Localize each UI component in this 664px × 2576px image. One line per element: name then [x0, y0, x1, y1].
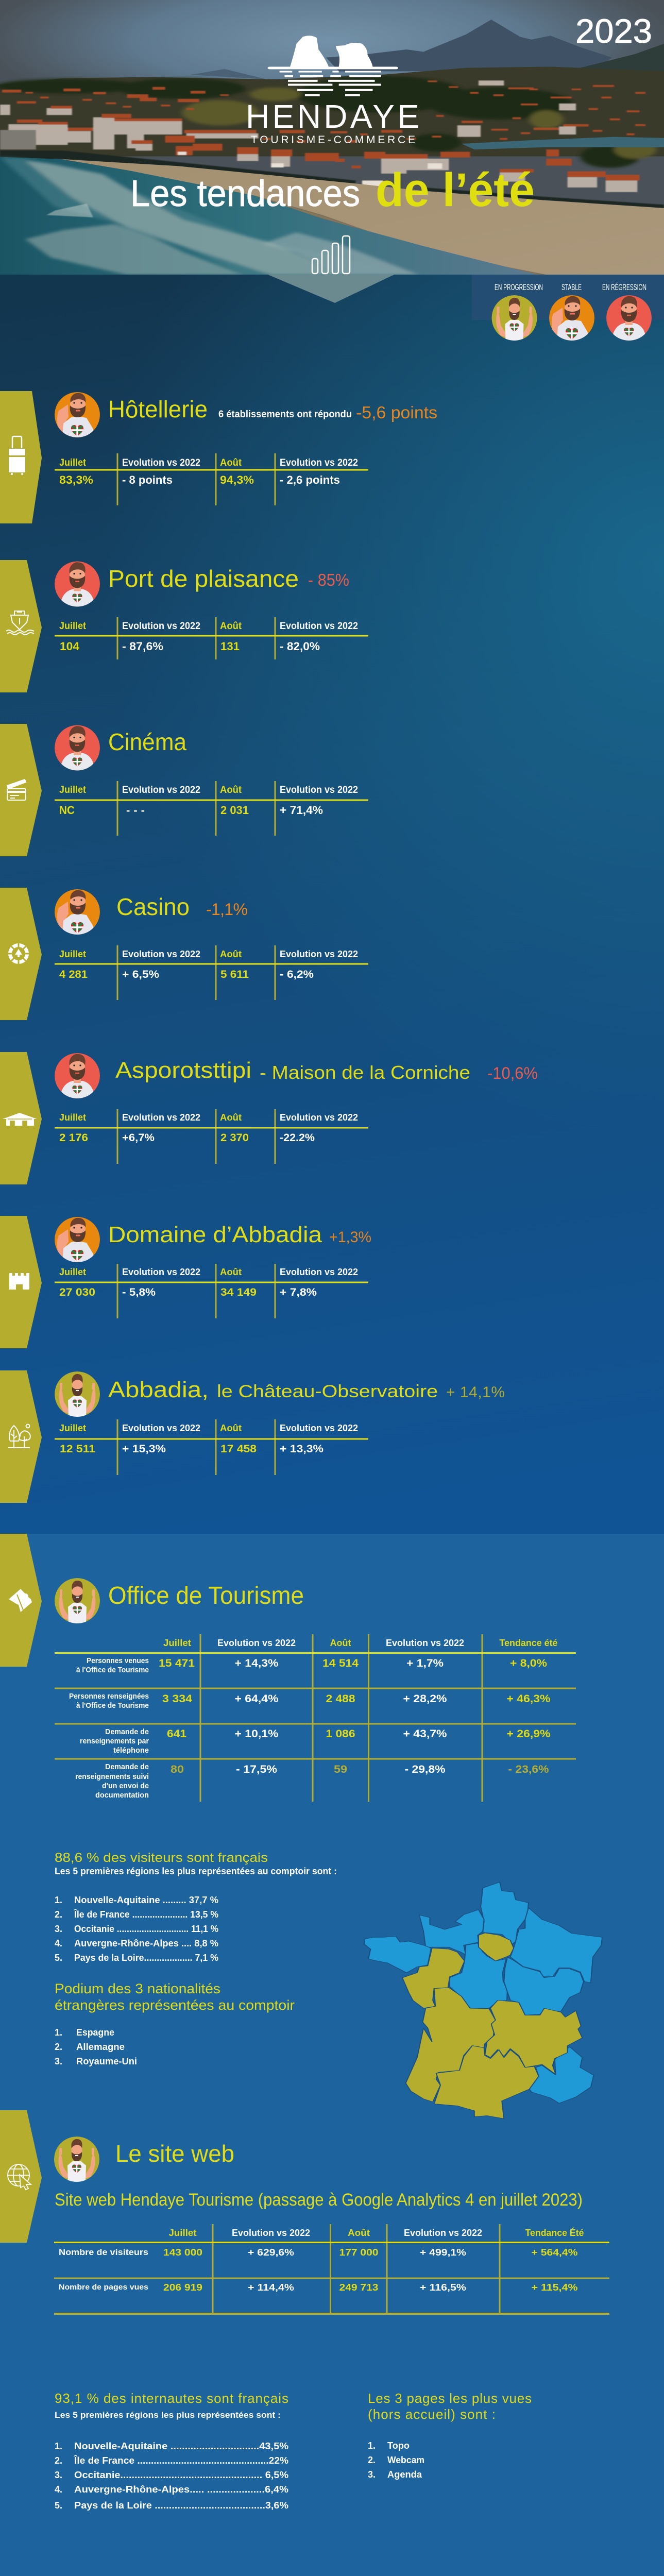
logo Hendaye: HENDAYE: [246, 98, 419, 135]
text block: internet users: Île de France ................................................22%: [74, 2455, 288, 2466]
text block: top pages: Topo: [387, 2441, 410, 2451]
panel: Domaine d'Abbadia: [0, 1216, 371, 1348]
table: Evolution vs 2022: [122, 1267, 200, 1277]
text block: top pages: Agenda: [387, 2469, 422, 2480]
table: Evolution vs 2022: [386, 1638, 464, 1648]
text block: podium nationalities: 1.: [55, 2027, 62, 2038]
table: Tendance été: [500, 1638, 557, 1648]
tab with suitcase icon: [0, 391, 42, 523]
legend: EN PROGRESSION: [495, 282, 543, 292]
table: 27 030: [59, 1286, 95, 1298]
table: Août: [220, 1267, 242, 1277]
panel: Le site web: [0, 2110, 609, 2511]
table: Août: [348, 2228, 370, 2238]
table: [55, 1109, 368, 1164]
table: Août: [330, 1638, 351, 1648]
panel: Cinéma: Cinéma: [108, 728, 186, 755]
tab with castle icon: [0, 1216, 42, 1348]
table: + 8,0%: [510, 1657, 547, 1669]
text block: visitors regions: 2.: [55, 1909, 62, 1920]
table: Evolution vs 2022: [232, 2228, 310, 2238]
text block: internet users: Auvergne-Rhône-Alpes..... ....................6,4%: [74, 2484, 288, 2495]
table: Août: [220, 1423, 242, 1433]
table: Evolution vs 2022: [217, 1638, 296, 1648]
table: Evolution vs 2022: [280, 785, 358, 795]
text block: top pages: Webcam: [387, 2455, 424, 2465]
table: + 14,3%: [235, 1657, 279, 1669]
icon: bar chart: [312, 236, 350, 274]
table: 59: [334, 1764, 347, 1775]
table: Juillet: [59, 1423, 86, 1433]
table: Personnes venues: [87, 1656, 149, 1665]
tab with office icon: [0, 1534, 42, 1667]
text block: internet users: [55, 2391, 288, 2511]
table: Juillet: [59, 1112, 86, 1123]
table: Juillet: [59, 621, 87, 632]
table: - 29,8%: [405, 1764, 446, 1775]
panel: Abbadia, le Château-Observatoire: + 14,1%: [446, 1384, 505, 1401]
text block: top pages: 3.: [368, 2469, 376, 2480]
table: [55, 453, 368, 505]
table: + 1,7%: [406, 1657, 444, 1669]
title: [130, 164, 535, 216]
text block: internet users: Nouvelle-Aquitaine ...............................43,5%: [74, 2441, 288, 2451]
table: NC: [59, 804, 75, 817]
title: de l’été: [376, 164, 535, 216]
panel: Le site web: Site web Hendaye Tourisme (passage à Google Analytics 4 en juillet 2023): [55, 2190, 583, 2210]
table: Evolution vs 2022: [122, 785, 200, 795]
table: - 17,5%: [236, 1764, 277, 1775]
text block: visitors regions: 1.: [55, 1895, 62, 1905]
panel: Asporotsttipi: - Maison de la Corniche: [260, 1062, 470, 1083]
tab with trees icon: [0, 1370, 42, 1503]
text block: visitors regions: Île de France ...................... 13,5 %: [74, 1909, 218, 1920]
panel: Casino: -1,1%: [206, 900, 248, 919]
table: + 115,4%: [532, 2282, 578, 2293]
table: - 82,0%: [280, 640, 320, 653]
table: à l'Office de Tourisme: [76, 1701, 149, 1710]
panel: Abbadia, le Château-Observatoire: le Château-Observatoire: [217, 1382, 438, 1401]
table: Evolution vs 2022: [122, 621, 200, 632]
text block: visitors regions: 3.: [55, 1924, 62, 1934]
table: - 8 points: [122, 473, 173, 486]
table: + 26,9%: [507, 1728, 551, 1740]
table: Evolution vs 2022: [280, 1423, 358, 1433]
table: 2 370: [220, 1132, 249, 1144]
table: [55, 1264, 368, 1318]
table: Août: [220, 621, 242, 632]
table: [55, 1419, 368, 1475]
panel: Asporotsttipi: -10,6%: [487, 1064, 538, 1082]
text block: visitors regions: Nouvelle-Aquitaine ......... 37,7 %: [74, 1895, 218, 1905]
text block: top pages: 2.: [368, 2455, 376, 2465]
table: Evolution vs 2022: [122, 949, 200, 959]
panel: Port de plaisance: [0, 560, 368, 692]
text block: visitors regions: Auvergne-Rhône-Alpes .... 8,8 %: [74, 1938, 218, 1948]
table: + 28,2%: [403, 1693, 447, 1705]
table: renseignements par: [80, 1737, 149, 1745]
tab with clapperboard icon: [0, 724, 42, 856]
panel: Hôtellerie: Hôtellerie: [108, 396, 208, 422]
panel: Abbadia, le Château-Observatoire: [0, 1370, 505, 1503]
map of France by region: [364, 1882, 602, 2119]
table: Juillet: [59, 785, 87, 795]
table: 2 176: [59, 1132, 88, 1144]
table: + 71,4%: [280, 804, 323, 817]
text block: top pages: (hors accueil) sont :: [368, 2406, 496, 2422]
table: Août: [220, 457, 242, 468]
text block: podium nationalities: 3.: [55, 2056, 62, 2066]
panel: Casino: [0, 888, 368, 1020]
tab with casino chip icon: [0, 888, 42, 1020]
panel: Port de plaisance: Port de plaisance: [108, 565, 299, 592]
table: Evolution vs 2022: [122, 1423, 200, 1433]
panel: Domaine d'Abbadia: +1,3%: [329, 1229, 371, 1246]
table: ---: [126, 804, 145, 817]
panel: Port de plaisance: - 85%: [308, 570, 349, 589]
table: téléphone: [113, 1746, 149, 1755]
table: [55, 781, 368, 836]
table: + 7,8%: [280, 1286, 317, 1298]
text block: visitors regions: Occitanie ............................. 11,1 %: [74, 1924, 218, 1934]
table: 14 514: [322, 1657, 359, 1669]
table: 143 000: [163, 2247, 202, 2258]
text block: podium nationalities: 2.: [55, 2042, 62, 2052]
panel: Casino: Casino: [116, 893, 190, 920]
table: Evolution vs 2022: [122, 457, 200, 468]
text block: internet users: 4.: [55, 2484, 62, 2495]
table: 249 713: [339, 2282, 378, 2293]
header photo of Hendaye beach: [0, 0, 664, 303]
text block: internet users: Les 5 premières régions les plus représentées sont :: [55, 2410, 281, 2420]
text block: internet users: Occitanie.................................................. 6,5%: [74, 2470, 288, 2480]
panel: Office de Tourisme: [0, 1534, 602, 2119]
text block: podium nationalities: Espagne: [76, 2027, 114, 2038]
table: Evolution vs 2022: [280, 621, 358, 632]
text block: internet users: 3.: [55, 2470, 62, 2480]
table: Demande de: [105, 1727, 149, 1736]
table: Août: [220, 785, 242, 795]
table: - 23,6%: [508, 1764, 549, 1775]
table: - 87,6%: [122, 640, 163, 653]
table: [55, 945, 368, 1000]
table: [55, 1634, 576, 1802]
table: 4 281: [59, 969, 88, 980]
table: + 499,1%: [420, 2247, 466, 2258]
table: + 114,4%: [248, 2282, 294, 2293]
table: [55, 617, 368, 659]
table: + 46,3%: [507, 1693, 551, 1705]
table: d'un envoi de: [102, 1782, 149, 1790]
table: Juillet: [59, 949, 86, 959]
table: renseignements suivi: [75, 1772, 149, 1781]
table: 1 086: [326, 1728, 355, 1740]
legend: STABLE: [561, 282, 582, 292]
text block: podium nationalities: [55, 1981, 295, 2066]
year: 2023: [575, 12, 652, 50]
title: Les tendances: [130, 173, 360, 214]
table: 5 611: [220, 969, 249, 980]
tab with building icon: [0, 1052, 42, 1184]
table: [54, 2224, 609, 2315]
table: 12 511: [60, 1443, 95, 1455]
table: Juillet: [169, 2228, 197, 2238]
logo Hendaye: [246, 36, 419, 146]
table: Juillet: [59, 1267, 86, 1277]
text block: podium nationalities: Royaume-Uni: [76, 2056, 137, 2066]
table: Juillet: [163, 1638, 191, 1648]
table: Tendance Été: [525, 2227, 584, 2238]
table: à l'Office de Tourisme: [76, 1666, 149, 1674]
table: 2 031: [220, 804, 249, 817]
table: 2 488: [326, 1693, 355, 1705]
table: Juillet: [59, 457, 87, 468]
text block: visitors regions: 4.: [55, 1938, 62, 1948]
text block: internet users: 5.: [55, 2500, 62, 2511]
table: + 10,1%: [235, 1728, 279, 1740]
text block: top pages: Les 3 pages les plus vues: [368, 2391, 532, 2406]
table: Evolution vs 2022: [404, 2228, 482, 2238]
table: -22.2%: [280, 1132, 315, 1144]
table: + 116,5%: [420, 2282, 466, 2293]
table: 15 471: [159, 1657, 195, 1669]
text block: podium nationalities: étrangères représentées au comptoir: [55, 1997, 295, 2013]
tab with globe cursor icon: [0, 2110, 42, 2243]
table: Août: [220, 949, 242, 959]
text block: podium nationalities: Allemagne: [76, 2042, 125, 2052]
panel: Cinéma: [0, 724, 368, 856]
table: Demande de: [105, 1762, 149, 1771]
panel: Asporotsttipi: [0, 1052, 538, 1184]
table: Nombre de pages vues: [59, 2283, 148, 2292]
text block: visitors regions: Les 5 premières régions les plus représentées au comptoir sont :: [55, 1866, 337, 1876]
table: 641: [167, 1728, 186, 1740]
table: - 2,6 points: [280, 473, 340, 486]
panel: Hôtellerie: -5,6 points: [356, 403, 437, 422]
table: Evolution vs 2022: [280, 1112, 358, 1123]
panel: Abbadia, le Château-Observatoire: Abbadia,: [108, 1377, 209, 1402]
triangular notch of photo: [268, 275, 394, 303]
table: Nombre de visiteurs: [59, 2247, 148, 2257]
panel: Le site web: Le site web: [115, 2140, 234, 2167]
panel: Asporotsttipi: Asporotsttipi: [115, 1058, 251, 1083]
text block: visitors regions: 5.: [55, 1953, 62, 1963]
text block: visitors regions: [55, 1851, 337, 1963]
text block: internet users: Pays de la Loire .......................................3,6%: [74, 2500, 288, 2511]
panel: Domaine d'Abbadia: Domaine d’Abbadia: [108, 1222, 322, 1247]
table: 104: [60, 640, 80, 653]
table: Personnes renseignées: [69, 1692, 149, 1701]
table: - 5,8%: [122, 1286, 156, 1298]
table: + 13,3%: [280, 1443, 324, 1455]
text block: top pages: [368, 2391, 532, 2480]
table: 34 149: [220, 1286, 257, 1298]
table: Août: [220, 1112, 242, 1123]
text block: podium nationalities: Podium des 3 nationalités: [55, 1981, 220, 1996]
table: Evolution vs 2022: [280, 1267, 358, 1277]
table: documentation: [95, 1791, 149, 1800]
text block: visitors regions: Pays de la Loire................... 7,1 %: [74, 1953, 218, 1963]
table: - 6,2%: [280, 969, 314, 980]
table: Evolution vs 2022: [280, 949, 358, 959]
text block: visitors regions: 88,6 % des visiteurs sont français: [55, 1851, 268, 1865]
table: + 64,4%: [235, 1693, 279, 1705]
table: 131: [220, 640, 240, 653]
table: 83,3%: [59, 473, 93, 486]
logo Hendaye: TOURISME-COMMERCE: [251, 134, 415, 146]
panel: Office de Tourisme: Office de Tourisme: [108, 1582, 304, 1609]
tab with ship icon: [0, 560, 42, 692]
panel: Hôtellerie: [0, 391, 437, 523]
table: + 629,6%: [248, 2247, 294, 2258]
table: + 564,4%: [532, 2247, 578, 2258]
table: + 15,3%: [122, 1443, 166, 1455]
table: 17 458: [220, 1443, 257, 1455]
table: +6,7%: [122, 1132, 155, 1144]
table: Evolution vs 2022: [122, 1112, 200, 1123]
table: 177 000: [339, 2247, 378, 2258]
table: + 43,7%: [403, 1728, 447, 1740]
text block: internet users: 2.: [55, 2455, 62, 2466]
panel: Hôtellerie: 6 établissements ont répondu: [218, 409, 352, 420]
legend: [472, 275, 664, 341]
table: 206 919: [163, 2282, 202, 2293]
table: Evolution vs 2022: [280, 457, 358, 468]
text block: internet users: 1.: [55, 2441, 62, 2451]
table: + 6,5%: [122, 969, 159, 980]
text block: internet users: 93,1 % des internautes sont français: [55, 2391, 288, 2406]
table: 80: [171, 1764, 184, 1775]
table: 94,3%: [220, 473, 254, 486]
text block: top pages: 1.: [368, 2441, 376, 2451]
table: 3 334: [162, 1693, 192, 1705]
